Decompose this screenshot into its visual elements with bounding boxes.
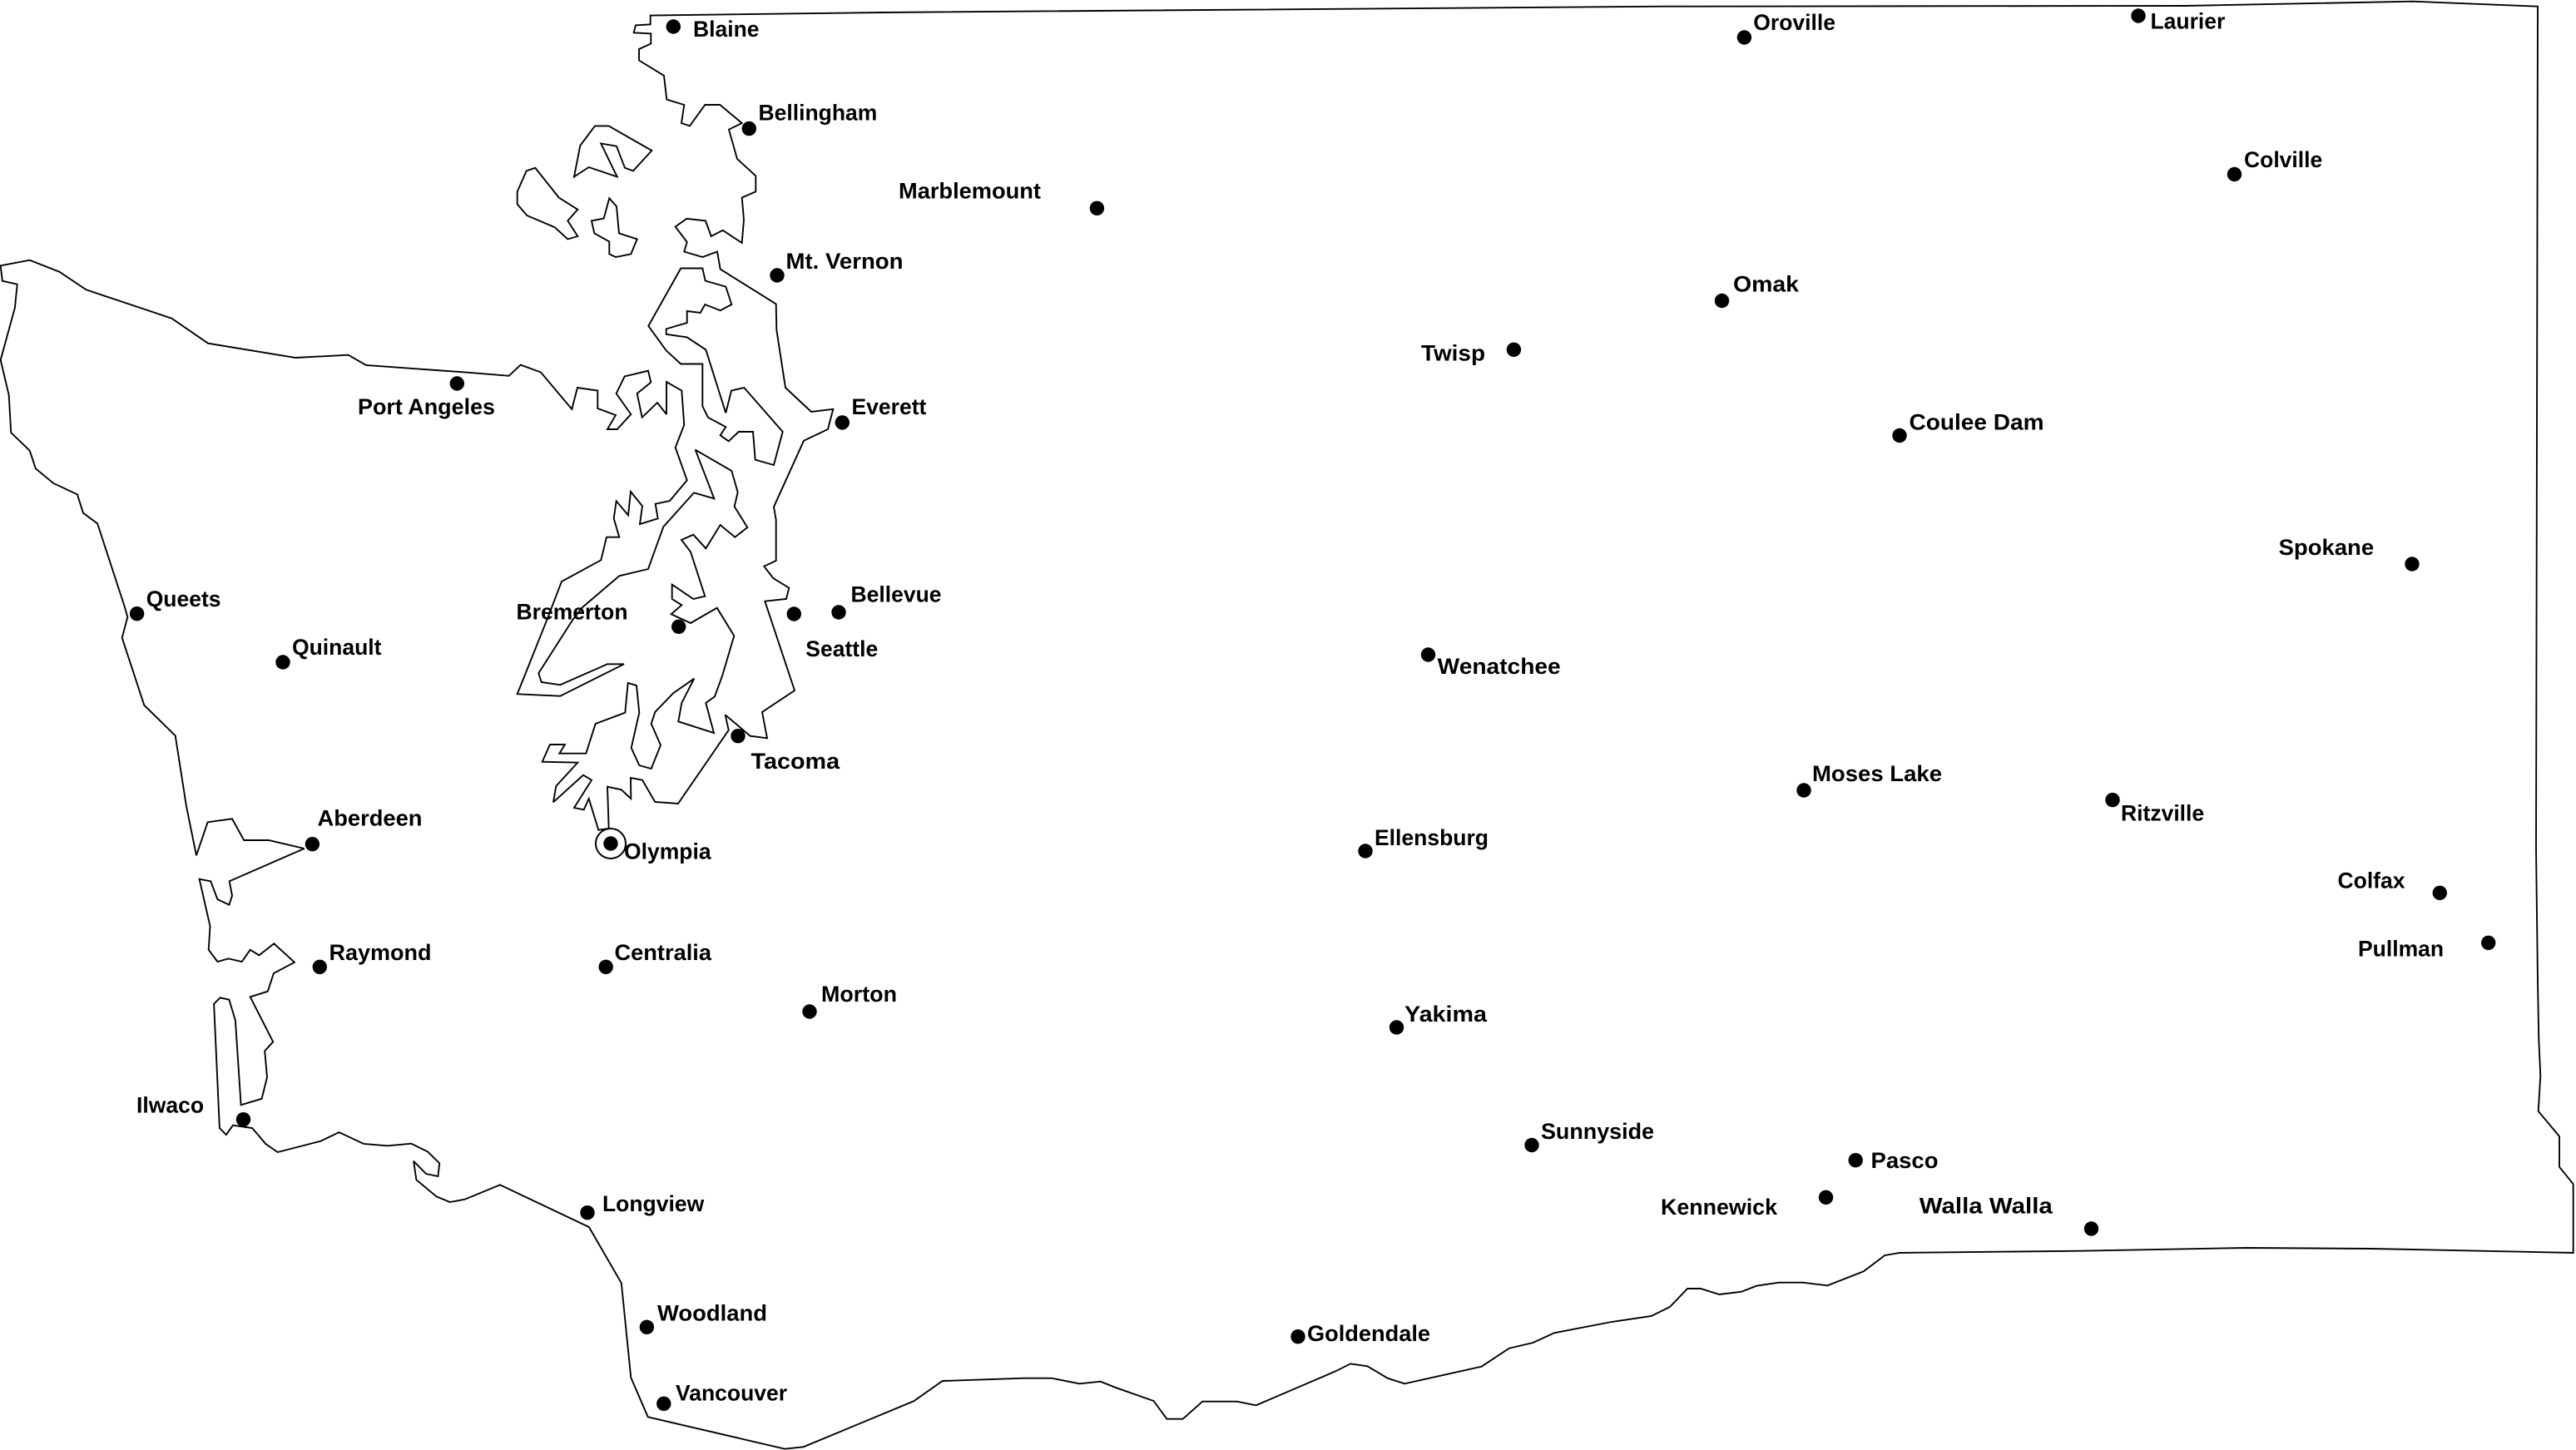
city: Centralia (599, 940, 711, 974)
city: Longview: Longview (602, 1191, 705, 1216)
city: Ritzville: Ritzville (2121, 800, 2204, 825)
city: Ritzville (2105, 793, 2204, 825)
city: Queets (130, 586, 221, 621)
city: Bellingham: Bellingham (759, 101, 877, 126)
city: Wenatchee: Wenatchee (1438, 654, 1561, 679)
city: Mt. Vernon: Mt. Vernon (785, 249, 904, 274)
city: Sunnyside (1524, 1119, 1654, 1152)
city: Aberdeen: Aberdeen (318, 805, 423, 830)
city: Pullman: Pullman (2358, 936, 2444, 961)
city: Ellensburg: Ellensburg (1375, 825, 1489, 850)
city: Marblemount: Marblemount (899, 178, 1041, 203)
city: Raymond: Raymond (329, 940, 431, 965)
city: Colville: Colville (2244, 147, 2322, 172)
city: Woodland: Woodland (657, 1300, 767, 1325)
city: Omak: Omak (1733, 271, 1799, 296)
city: Sunnyside: Sunnyside (1541, 1119, 1654, 1144)
city: Twisp (1421, 340, 1521, 365)
city: Mt. Vernon (770, 249, 904, 283)
city: Walla Walla: Walla Walla (1920, 1194, 2053, 1219)
city: Aberdeen (305, 805, 423, 851)
city: Vancouver: Vancouver (676, 1380, 787, 1405)
city: Moses Lake (1796, 761, 1942, 798)
city: Spokane (2279, 535, 2420, 572)
city: Bellingham (742, 101, 877, 136)
city: Wenatchee (1421, 647, 1561, 679)
city: Kennewick: Kennewick (1661, 1195, 1777, 1220)
city: Olympia (state capital) (596, 829, 711, 864)
city: Seattle: Seattle (805, 636, 878, 661)
city: Port Angeles (358, 376, 495, 419)
city: Raymond (313, 940, 431, 974)
city: Laurier: Laurier (2150, 8, 2225, 33)
city: Oroville: Oroville (1753, 10, 1835, 35)
city: Coulee Dam: Coulee Dam (1909, 409, 2043, 434)
city: Moses Lake: Moses Lake (1812, 761, 1942, 786)
city: Kennewick (1661, 1190, 1833, 1220)
city: Ilwaco: Ilwaco (136, 1092, 204, 1117)
city: Marblemount (899, 178, 1104, 215)
city: Omak (1715, 271, 1799, 308)
city: Bellevue (831, 581, 942, 620)
city: Coulee Dam (1892, 409, 2043, 443)
city: Vancouver (656, 1380, 787, 1411)
city: Twisp: Twisp (1421, 340, 1485, 365)
city: Bremerton (516, 599, 686, 634)
city: Tacoma (731, 729, 840, 774)
city: Everett: Everett (852, 394, 927, 419)
city: Bremerton: Bremerton (516, 599, 628, 624)
city: Colfax: Colfax (2338, 868, 2405, 893)
city: Morton (802, 982, 897, 1019)
city: Blaine: Blaine (693, 17, 760, 42)
city: Pullman (2358, 936, 2495, 961)
city: Walla Walla (1920, 1194, 2098, 1236)
city: Seattle (787, 606, 878, 661)
city: Pasco: Pasco (1870, 1148, 1939, 1173)
city: Yakima: Yakima (1404, 1002, 1487, 1027)
city: Quinault (275, 635, 382, 670)
city: Olympia (state capital): Olympia (624, 839, 711, 864)
city: Quinault: Quinault (292, 635, 382, 660)
island: Orcas (574, 126, 651, 176)
island: Lopez (592, 198, 637, 257)
city: Queets: Queets (146, 586, 221, 611)
city: Spokane: Spokane (2279, 535, 2374, 560)
city: Morton: Morton (821, 982, 897, 1007)
city: Woodland (640, 1300, 767, 1334)
city: Everett (835, 394, 927, 430)
city: Centralia: Centralia (614, 940, 711, 965)
city: Yakima (1390, 1002, 1487, 1035)
city: Ilwaco (136, 1092, 250, 1126)
city: Bellevue: Bellevue (850, 581, 942, 606)
city: Tacoma: Tacoma (751, 749, 840, 774)
city: Goldendale: Goldendale (1307, 1321, 1430, 1346)
island: Whidbey (648, 268, 783, 465)
island: San Juan (518, 168, 577, 240)
city: Oroville (1737, 10, 1835, 45)
city: Colville (2227, 147, 2322, 181)
city: Port Angeles: Port Angeles (358, 394, 495, 419)
city: Colfax (2338, 868, 2447, 900)
city: Ellensburg (1358, 825, 1489, 859)
